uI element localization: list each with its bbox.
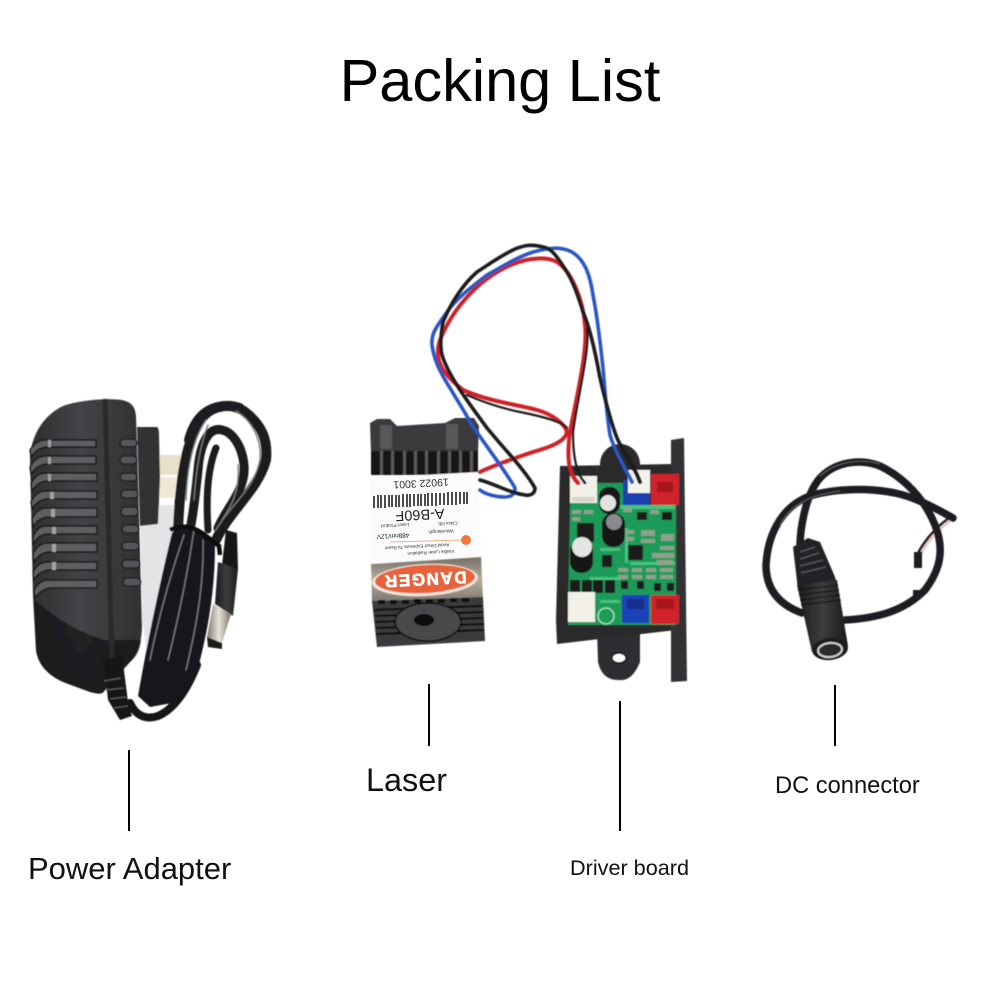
- PCB chips: [570, 512, 674, 593]
- barcode: [374, 492, 467, 508]
- label: DC connector: DC connector: [775, 773, 920, 799]
- small capacitor: [599, 487, 620, 514]
- lower mounting tab: [597, 628, 640, 680]
- product text: Laser Product: [380, 522, 409, 529]
- mounting hole: [612, 653, 626, 663]
- socket face: [811, 636, 849, 662]
- large capacitor: [570, 537, 593, 573]
- front panel teeth: [378, 598, 469, 604]
- warning dot: [390, 535, 471, 545]
- pink wires: [920, 517, 953, 552]
- strain relief: [104, 655, 132, 720]
- pointer line: laser: [428, 684, 430, 746]
- housing: [556, 464, 676, 644]
- laser label text: [374, 476, 471, 591]
- product: DC connector: [766, 461, 953, 662]
- connector: blue top: [623, 470, 650, 505]
- black companion wire: [467, 328, 587, 483]
- cable highlights: [780, 461, 880, 525]
- plug base: [137, 427, 160, 526]
- green PCB: [568, 483, 676, 625]
- power text: 488nm/12V: [376, 531, 409, 540]
- label: driver board: Driver board: [570, 856, 689, 880]
- DC plug: [207, 530, 238, 649]
- cable bundle: [138, 527, 215, 707]
- pointer line: DC connector: [834, 685, 836, 746]
- vent slots right: [120, 439, 141, 586]
- model name: A-B60F: [395, 505, 445, 523]
- label: power adapter: Power Adapter: [28, 851, 231, 886]
- front panel grooves: [374, 606, 484, 634]
- black wire: [441, 245, 640, 495]
- upper mounting tab: [600, 444, 640, 484]
- connecting wires: [432, 245, 640, 497]
- front panel: [372, 597, 485, 647]
- title: Packing List: [340, 47, 661, 114]
- product: laser module: [370, 418, 485, 647]
- pointer line: power adapter: [128, 750, 130, 831]
- socket ring: [817, 642, 843, 658]
- adapter body: [30, 399, 142, 694]
- warning text 2: Visible Laser Radiation: [407, 549, 455, 556]
- danger text: DANGER: [383, 567, 467, 591]
- dupont pins: [913, 552, 922, 598]
- adapter lower shading: [34, 600, 141, 694]
- danger sticker oval: [374, 562, 476, 596]
- connector: red top right: [651, 474, 679, 505]
- product: power adapter: [30, 399, 266, 720]
- middle capacitor: [602, 513, 625, 547]
- vent slots left: [30, 440, 97, 598]
- cable tie: [170, 527, 220, 555]
- connector: red bottom: [651, 595, 679, 624]
- red wire: [438, 258, 586, 483]
- adapter shadow: [140, 505, 180, 660]
- PCB traces: [590, 505, 675, 603]
- connector: white top left: [570, 476, 597, 503]
- barrel: [797, 580, 848, 652]
- coiled cable: [130, 405, 266, 717]
- end post: [671, 438, 687, 682]
- pointer line: driver board: [619, 701, 621, 831]
- barrel grooves: [798, 585, 841, 605]
- white label: [370, 472, 481, 564]
- cable loop: [766, 462, 953, 620]
- adapter seam: [105, 399, 112, 660]
- lens: [414, 614, 434, 626]
- strain relief: [793, 538, 837, 590]
- lens plate: [395, 603, 461, 641]
- heatsink notches: [380, 424, 458, 449]
- wavelength text: Wavelength: [428, 527, 454, 535]
- plug blades: [156, 455, 183, 498]
- serial number: 19022 3001: [393, 476, 449, 490]
- label: laser: Laser: [366, 762, 447, 798]
- blue wire: [432, 248, 632, 497]
- product: driver board: [556, 438, 687, 682]
- connector: blue bottom: [622, 595, 649, 623]
- relief slots: [800, 547, 826, 573]
- danger sticker halo: [371, 561, 479, 599]
- metal body: [371, 555, 483, 603]
- PCB hole: [598, 608, 614, 624]
- cable stripes: [150, 411, 260, 670]
- fins: [371, 451, 478, 475]
- vent slot highlights: [48, 440, 56, 570]
- connector: white bottom: [568, 592, 595, 622]
- warning text 1: Avoid Direct Exposure To Beam: [384, 542, 449, 551]
- laser top heatsink: [370, 418, 479, 453]
- PCB smd components: [572, 508, 674, 579]
- class text: Class IIIb: [438, 521, 458, 527]
